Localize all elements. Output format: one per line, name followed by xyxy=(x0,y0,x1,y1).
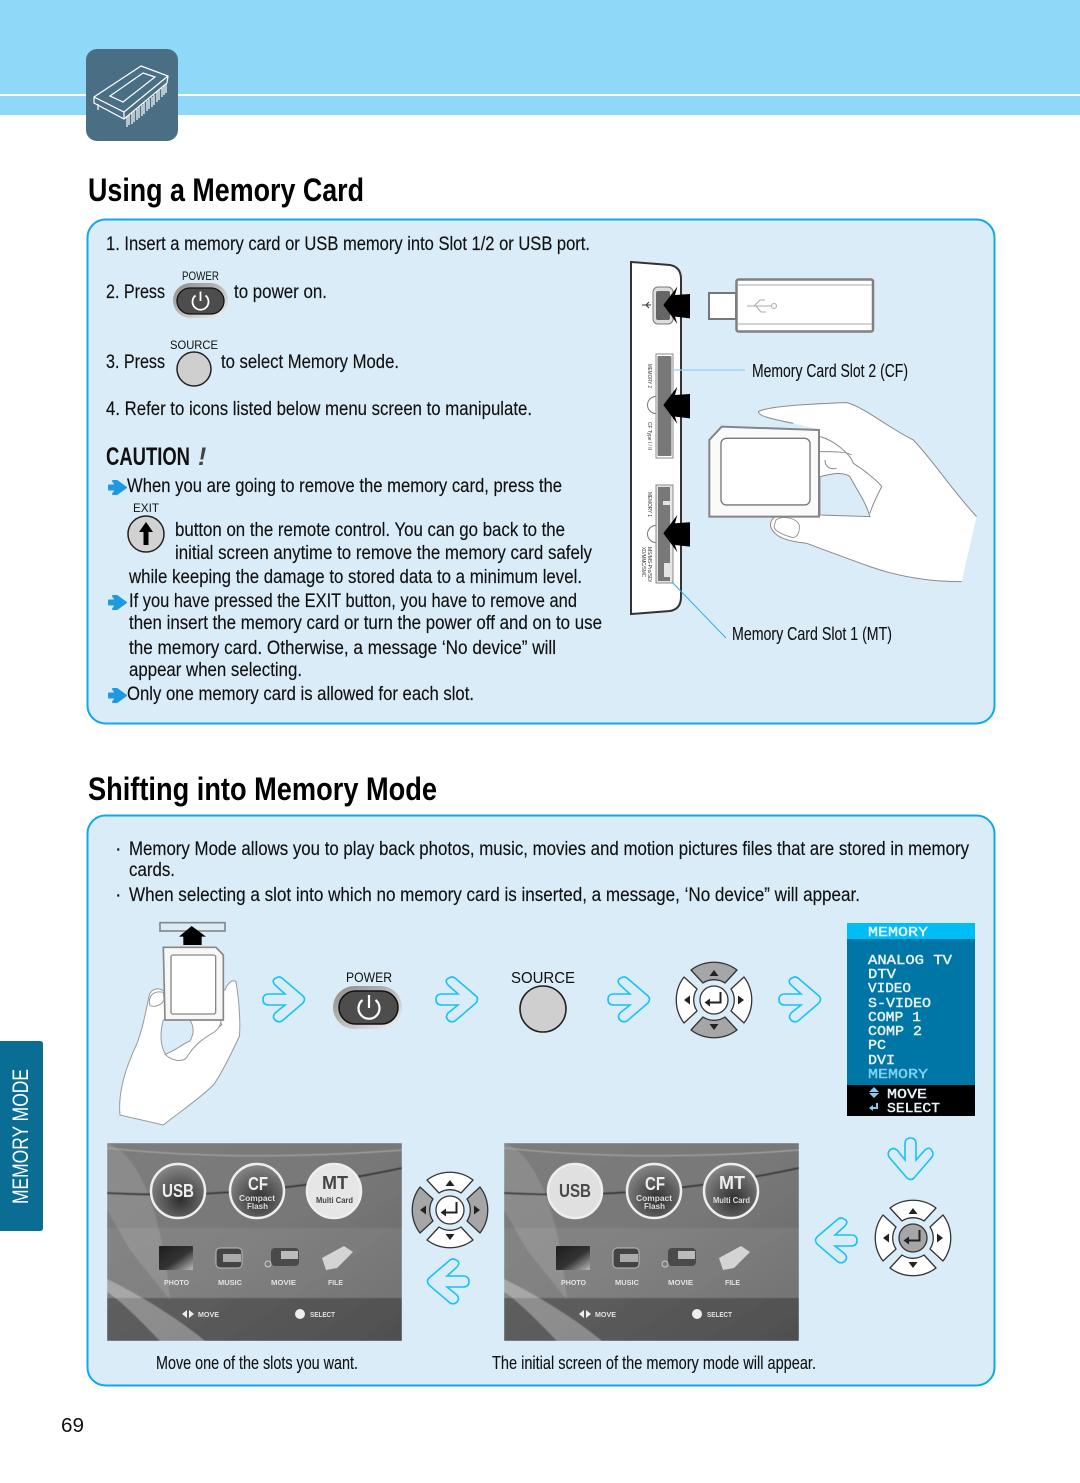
caution heading: CAUTION xyxy=(106,443,190,471)
cf slot: MEMORY 2 xyxy=(646,364,652,388)
slot circles: Flash xyxy=(247,1202,268,1211)
flow arrow: left to screen xyxy=(816,1218,857,1263)
on-screen source menu: ANALOG TV xyxy=(868,953,953,969)
slot circles xyxy=(151,1164,361,1218)
caution item 1: EXIT xyxy=(133,501,160,515)
flow arrow: down xyxy=(888,1138,933,1180)
mt slot: MS/MS-Pro/SD/ xyxy=(646,547,652,583)
on-screen source menu: COMP 2 xyxy=(868,1024,922,1040)
step 2 with power button xyxy=(106,271,327,318)
slot circles: CF xyxy=(645,1174,665,1194)
slot circles: MT xyxy=(322,1173,348,1193)
on-screen source menu: MEMORY xyxy=(868,925,929,941)
source button xyxy=(511,970,575,1032)
slot circles: MT xyxy=(719,1173,745,1193)
media icons: MUSIC xyxy=(615,1280,639,1287)
on-screen source menu: VIDEO xyxy=(868,981,911,997)
step 2 with power button: to power on. xyxy=(234,281,327,303)
step 2 with power button: POWER xyxy=(182,271,219,283)
caution item 1: initial screen anytime to remove the memory card safely xyxy=(175,542,592,564)
navigation pad: up and down highlighted xyxy=(676,962,752,1038)
caution item 2: If you have pressed the EXIT button, you have to remove and xyxy=(129,590,577,612)
on-screen source menu: MEMORY xyxy=(868,1067,929,1083)
device side panel with slots xyxy=(631,262,690,614)
callout line: slot 2 xyxy=(673,369,745,371)
intro text: · xyxy=(115,838,122,860)
media icons: FILE xyxy=(328,1280,343,1287)
step 3 with source button xyxy=(106,338,399,386)
on-screen source menu: PC xyxy=(868,1038,886,1054)
slot circles: Compact xyxy=(239,1194,275,1203)
on-screen source menu: DVI xyxy=(868,1053,895,1069)
on-screen source menu: S-VIDEO xyxy=(868,996,931,1012)
caution item 2: then insert the memory card or turn the power off and on to use xyxy=(129,612,602,634)
on-screen source menu xyxy=(847,923,975,1117)
step 1 text: 1. Insert a memory card or USB memory into Slot 1/2 or USB port. xyxy=(106,233,590,255)
slot circles: Multi Card xyxy=(713,1196,750,1205)
intro text: Memory Mode allows you to play back photos, music, movies and motion pictures files that are stored in memory xyxy=(129,838,969,860)
caution heading: ! xyxy=(198,443,206,471)
screen footer xyxy=(182,1309,336,1319)
heading: Using a Memory Card: Using a Memory Card xyxy=(88,172,364,208)
screen: memory mode initial with USB highlighted xyxy=(504,1143,799,1341)
media icons: PHOTO xyxy=(561,1280,587,1287)
screen footer: MOVE xyxy=(198,1312,219,1319)
usb stick xyxy=(709,280,873,332)
step 3 with source button: to select Memory Mode. xyxy=(221,351,399,373)
icon: memory chip xyxy=(86,49,178,141)
navigation pad: enter highlighted xyxy=(875,1200,951,1276)
source button: SOURCE xyxy=(511,970,575,987)
media icons xyxy=(556,1246,750,1287)
caution item 3: Only one memory card is allowed for each slot. xyxy=(127,683,474,705)
slot circles: Flash xyxy=(644,1202,665,1211)
cf slot xyxy=(646,354,673,458)
screen footer: SELECT xyxy=(310,1312,336,1319)
flow arrow: left xyxy=(428,1259,469,1304)
step 3 with source button: 3. Press xyxy=(106,351,165,373)
mt slot: XD/MMC/SMC xyxy=(640,547,646,577)
usb port xyxy=(642,287,673,324)
mt slot xyxy=(640,485,673,583)
on-screen source menu: MOVE xyxy=(887,1087,927,1103)
mt slot: MEMORY 1 xyxy=(646,492,652,517)
slot circles: Compact xyxy=(636,1194,672,1203)
header band xyxy=(0,0,1080,115)
caution item 2 xyxy=(109,590,602,681)
slot circles xyxy=(548,1164,758,1218)
heading: Shifting into Memory Mode: Shifting into Memory Mode xyxy=(88,771,437,807)
side tab: memory mode: MEMORY MODE xyxy=(8,1069,33,1204)
caution item 2: appear when selecting. xyxy=(129,659,302,681)
screen footer: MOVE xyxy=(595,1312,616,1319)
flow arrow 2 xyxy=(436,977,478,1022)
caution item 1 xyxy=(109,475,592,588)
flow arrow 4 xyxy=(779,977,820,1022)
media icons: PHOTO xyxy=(164,1280,190,1287)
media icons: MOVIE xyxy=(271,1280,296,1287)
flow arrow 1 xyxy=(263,977,304,1022)
intro text: When selecting a slot into which no memory card is inserted, a message, ‘No device” will appear. xyxy=(129,884,860,906)
caution item 1: button on the remote control. You can go back to the xyxy=(175,519,565,541)
callout line: slot 1 xyxy=(672,582,726,638)
side tab: memory mode xyxy=(0,1041,43,1231)
step 2 with power button: 2. Press xyxy=(106,281,165,303)
screen: slot selection with MT highlighted xyxy=(107,1143,402,1341)
flow arrow 3 xyxy=(608,977,650,1022)
on-screen source menu: SELECT xyxy=(887,1101,940,1117)
slot circles: USB xyxy=(162,1181,194,1201)
on-screen source menu: DTV xyxy=(868,967,897,983)
on-screen source menu: COMP 1 xyxy=(868,1010,921,1026)
slot circles: Multi Card xyxy=(316,1196,353,1205)
caution item 1: while keeping the damage to stored data to a minimum level. xyxy=(128,566,582,588)
power button: POWER xyxy=(346,969,392,985)
caption: move slots: Move one of the slots you want. xyxy=(156,1353,358,1373)
hand holding memory card xyxy=(709,403,977,582)
intro text xyxy=(115,838,969,906)
slot circles: CF xyxy=(248,1174,268,1194)
hand inserting card xyxy=(120,923,240,1125)
caution item 1: When you are going to remove the memory card, press the xyxy=(127,475,562,497)
media icons: MUSIC xyxy=(218,1280,242,1287)
cf slot: CF Type I / II xyxy=(646,422,652,450)
panel: using a memory card xyxy=(88,220,994,724)
slot circles: USB xyxy=(559,1181,591,1201)
caption: initial screen: The initial screen of the memory mode will appear. xyxy=(492,1353,816,1373)
media icons: MOVIE xyxy=(668,1280,693,1287)
media icons: FILE xyxy=(725,1280,740,1287)
step 4 text: 4. Refer to icons listed below menu screen to manipulate. xyxy=(106,398,532,420)
page number: 69 xyxy=(61,1415,84,1437)
label: memory card slot 2: Memory Card Slot 2 (CF) xyxy=(752,361,908,381)
navigation pad: left and right highlighted xyxy=(412,1172,488,1248)
insert arrows xyxy=(663,287,690,552)
label: memory card slot 1: Memory Card Slot 1 (MT) xyxy=(732,624,892,644)
screen footer: SELECT xyxy=(707,1312,733,1319)
media icons xyxy=(159,1246,353,1287)
caution item 2: the memory card. Otherwise, a message ‘No device” will xyxy=(129,637,556,659)
panel: shifting into memory mode xyxy=(88,816,994,1386)
intro text: cards. xyxy=(129,859,175,881)
intro text: · xyxy=(115,884,122,906)
step 3 with source button: SOURCE xyxy=(170,338,218,352)
power button xyxy=(333,969,402,1029)
screen footer xyxy=(579,1309,733,1319)
